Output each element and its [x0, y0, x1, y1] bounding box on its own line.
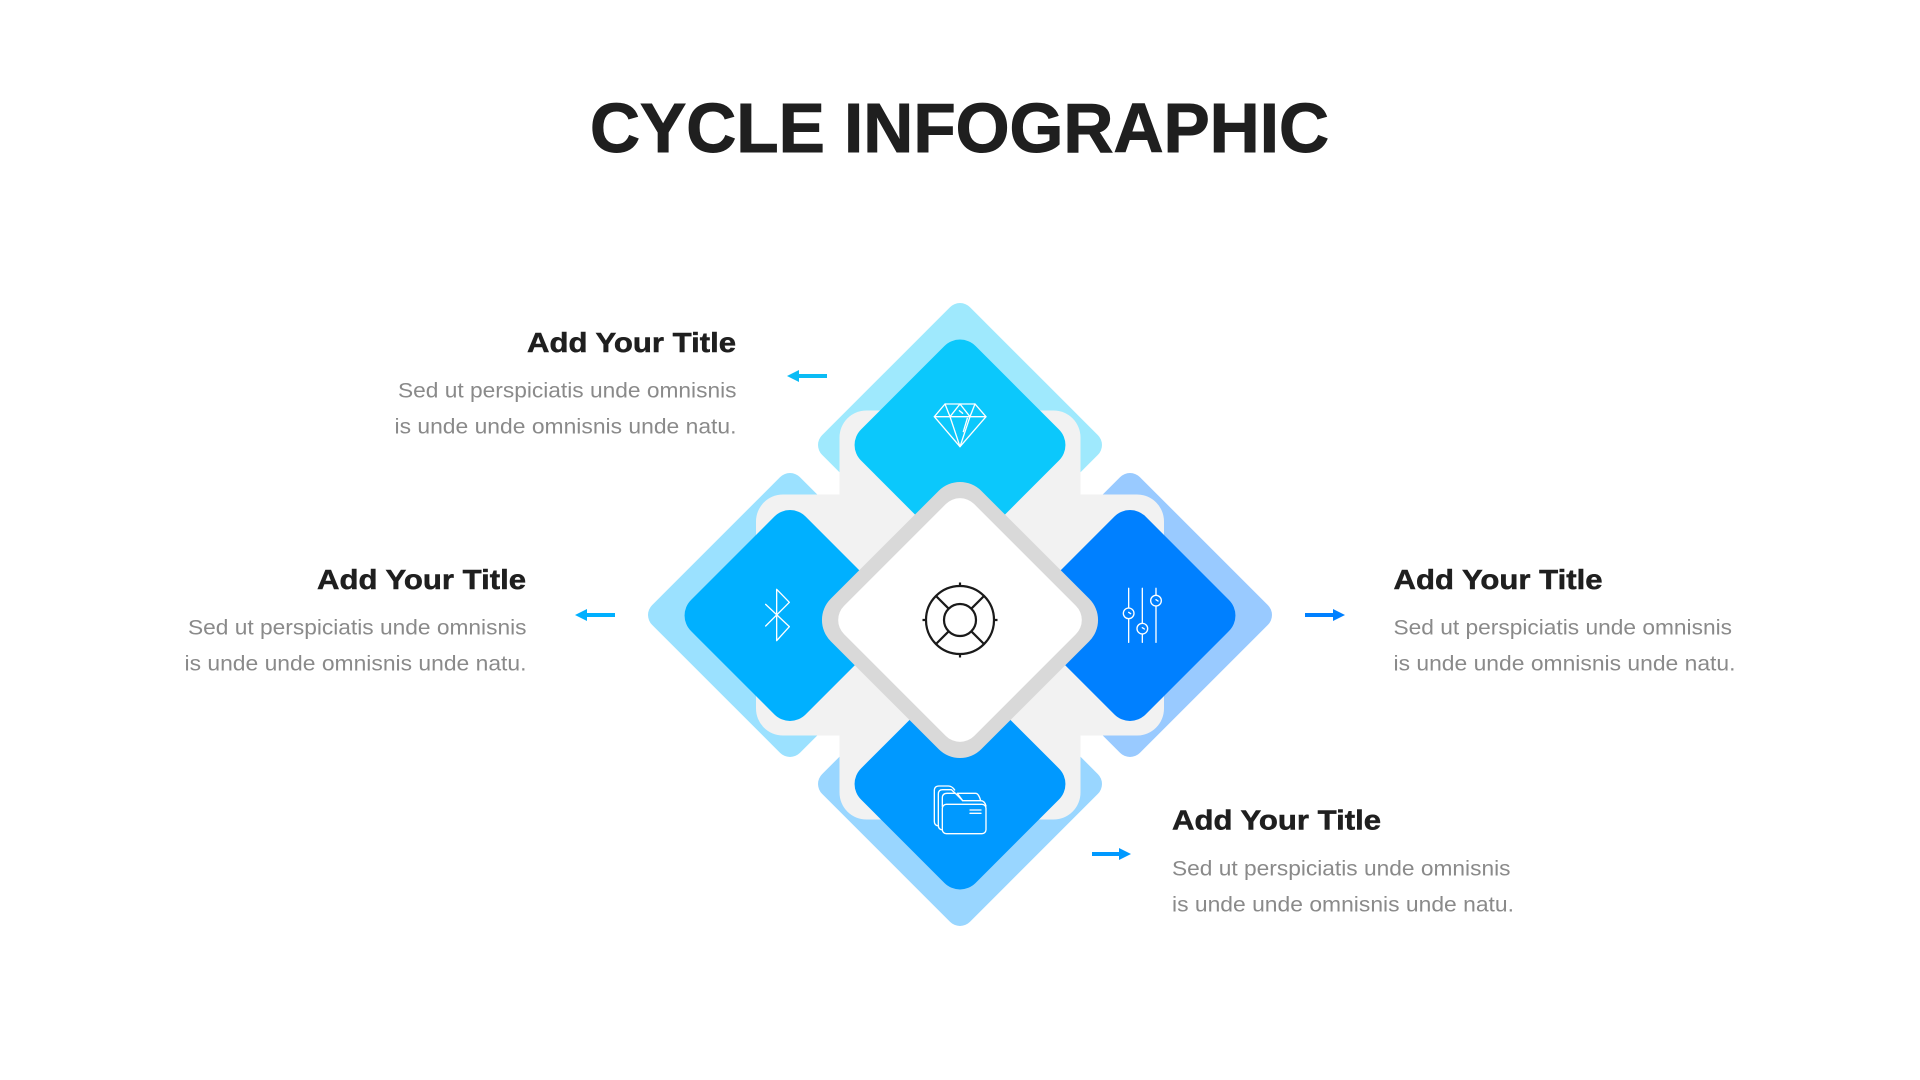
- text block: bottom right: is unde unde omnisnis unde natu.: [1172, 892, 1514, 916]
- text block: top left: Add Your Title: [527, 327, 736, 358]
- inner diamond: top: [845, 330, 1075, 560]
- outer diamond: right: [982, 467, 1278, 763]
- inner diamond: right: [1015, 501, 1245, 730]
- light cross: horizontal bar: [756, 494, 1164, 736]
- text block: right: Sed ut perspiciatis unde omnisnis: [1394, 616, 1732, 640]
- text block: left: Sed ut perspiciatis unde omnisnis: [188, 616, 526, 640]
- center diamond ring: [810, 470, 1110, 770]
- icon: lifebuoy: [922, 582, 998, 658]
- text block: left: Add Your Title: [317, 564, 526, 595]
- text block: bottom right: Sed ut perspiciatis unde omnisnis: [1172, 856, 1510, 880]
- arrow: right: [1305, 609, 1345, 621]
- icon: folders: [934, 786, 986, 834]
- text block: right: [1394, 564, 1736, 676]
- text block: right: is unde unde omnisnis unde natu.: [1394, 652, 1736, 676]
- inner diamond: bottom: [845, 669, 1075, 899]
- text block: bottom right: [1172, 804, 1514, 916]
- light cross: vertical bar: [840, 410, 1080, 820]
- icon: sliders: [1123, 588, 1161, 642]
- arrow: bottom right: [1092, 848, 1131, 860]
- inner diamond: left: [675, 501, 905, 730]
- outer diamond: top: [812, 297, 1108, 593]
- text block: top left: [394, 327, 736, 438]
- icon: diamond: [934, 404, 986, 447]
- arrow: left: [575, 609, 615, 621]
- text block: left: is unde unde omnisnis unde natu.: [184, 652, 526, 676]
- outer diamond: bottom: [812, 636, 1108, 932]
- title: CYCLE INFOGRAPHIC: [590, 89, 1329, 167]
- center diamond: [830, 490, 1090, 750]
- text block: top left: is unde unde omnisnis unde natu.: [394, 414, 736, 438]
- outer diamond: left: [642, 467, 938, 763]
- icon: bluetooth: [766, 589, 789, 641]
- text block: right: Add Your Title: [1394, 564, 1602, 595]
- arrow: top left: [787, 370, 827, 382]
- cycle diagram: [642, 297, 1278, 932]
- text block: bottom right: Add Your Title: [1172, 804, 1381, 836]
- text block: left: [184, 564, 526, 676]
- text block: top left: Sed ut perspiciatis unde omnisnis: [398, 378, 736, 402]
